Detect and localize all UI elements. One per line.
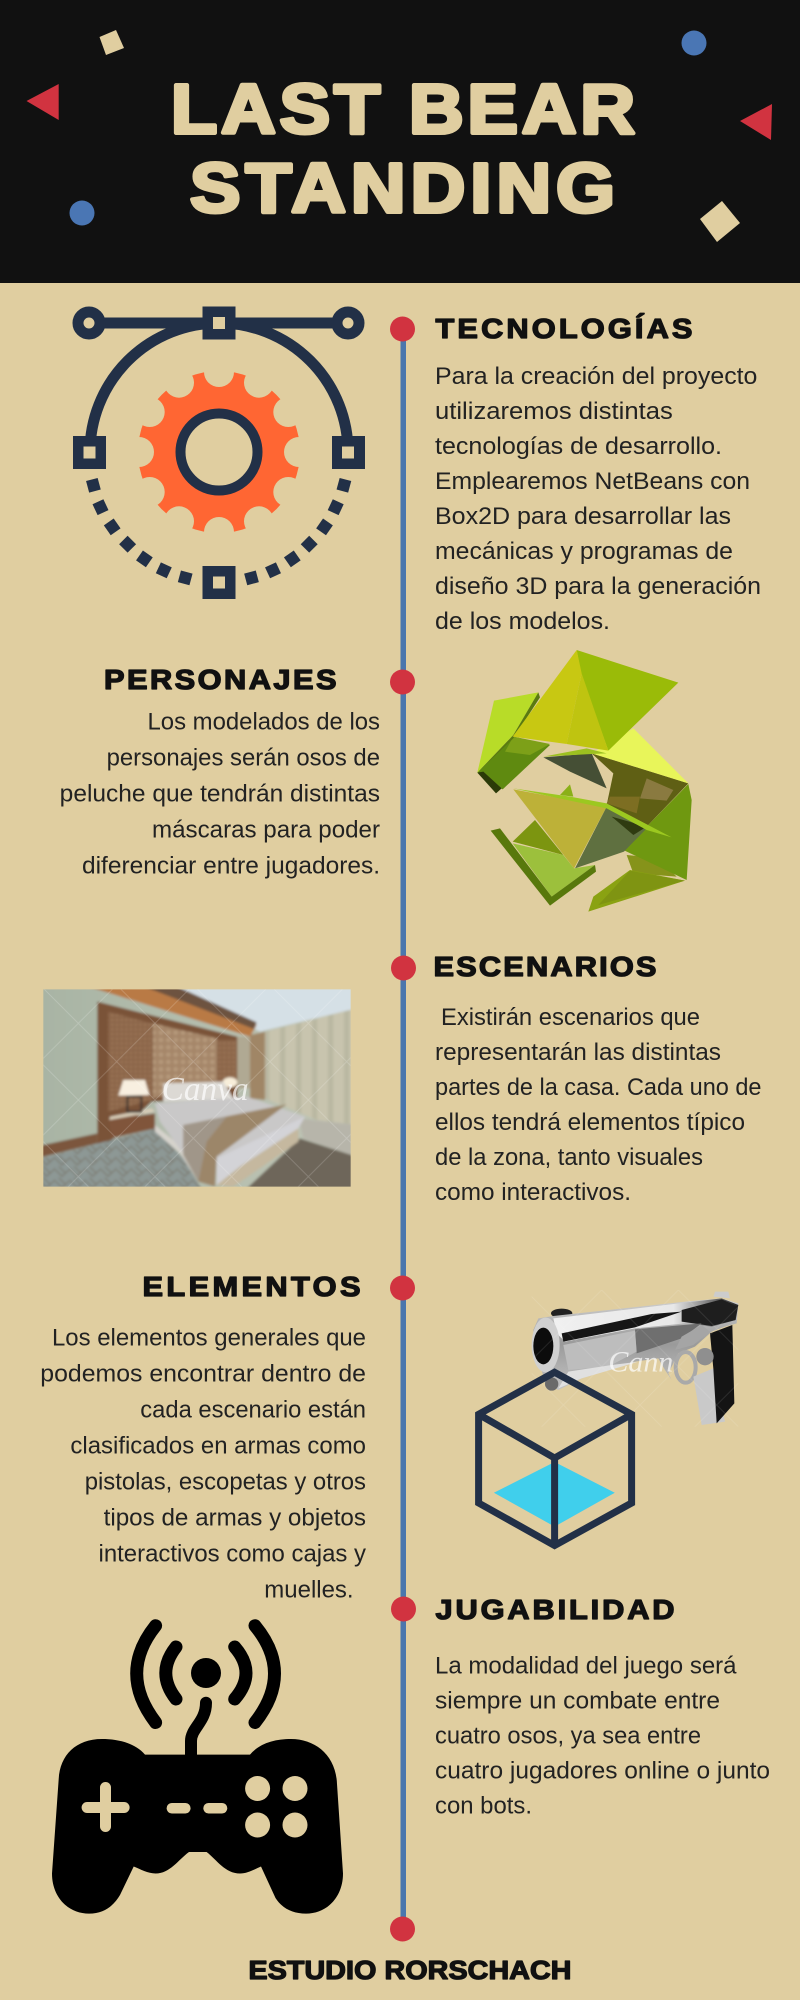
text block: personajes: personajes serán osos de — [107, 744, 380, 772]
icon: pistol — [532, 1290, 738, 1427]
heading: tecnologias: TECNOLOGÍAS — [436, 312, 692, 345]
section: jugabilidad — [435, 1594, 770, 1820]
text block: tecnologias: Box2D para desarrollar las — [435, 503, 731, 530]
text block: jugabilidad: La modalidad del juego será — [435, 1652, 737, 1680]
text block: escenarios: ellos tendrá elementos típico — [435, 1109, 745, 1136]
text block: jugabilidad: con bots. — [435, 1792, 532, 1820]
text block: elementos: podemos encontrar dentro de — [40, 1360, 366, 1388]
text block: personajes: peluche que tendrán distintas — [60, 780, 380, 808]
section: personajes — [60, 664, 380, 880]
photo: hotel bedroom — [40, 985, 357, 1192]
text block: personajes: diferenciar entre jugadores. — [82, 852, 380, 880]
icon: cube — [479, 1372, 632, 1546]
text block: escenarios: representarán las distintas — [435, 1039, 721, 1066]
text block: elementos: interactivos como cajas y — [98, 1540, 366, 1568]
text block: personajes: máscaras para poder — [152, 816, 380, 844]
text block: tecnologias: Para la creación del proyecto — [435, 363, 757, 390]
heading: escenarios: ESCENARIOS — [434, 951, 656, 983]
icon: green 3D shape — [477, 650, 692, 912]
photo: hotel bedroom: Canva — [162, 1071, 249, 1108]
heading: personajes: PERSONAJES — [104, 664, 337, 696]
text block: personajes — [60, 708, 380, 880]
text block: elementos: clasificados en armas como — [70, 1432, 366, 1460]
icon: game controller — [52, 1626, 343, 1914]
icon: gear with bezier curve — [73, 306, 365, 599]
section: tecnologias — [435, 312, 761, 635]
heading: elementos: ELEMENTOS — [142, 1271, 361, 1303]
text block: tecnologias: mecánicas y programas de — [435, 538, 733, 565]
text block: jugabilidad: cuatro jugadores online o junto — [435, 1758, 770, 1784]
section: elementos — [40, 1271, 366, 1604]
text block: tecnologias — [435, 363, 761, 635]
title: STANDING — [190, 150, 615, 227]
text block: elementos — [40, 1324, 366, 1604]
text block: personajes: Los modelados de los — [148, 708, 380, 736]
title: LAST BEAR — [171, 71, 635, 148]
text block: escenarios: de la zona, tanto visuales — [435, 1144, 703, 1171]
icon: pistol: Cann — [608, 1346, 673, 1379]
text block: escenarios — [435, 1004, 762, 1206]
text block: escenarios: como interactivos. — [435, 1179, 631, 1206]
text block: escenarios: Existirán escenarios que — [441, 1004, 700, 1031]
text block: elementos: muelles. — [264, 1576, 354, 1604]
text block: tecnologias: Emplearemos NetBeans con — [435, 468, 750, 495]
text block: tecnologias: utilizaremos distintas — [435, 398, 673, 425]
header panel — [0, 0, 800, 283]
title — [171, 71, 635, 227]
text block: elementos: tipos de armas y objetos — [104, 1504, 366, 1532]
footer: studio name: ESTUDIO RORSCHACH — [248, 1955, 571, 1985]
text block: tecnologias: de los modelos. — [435, 608, 610, 635]
text block: jugabilidad: siempre un combate entre — [435, 1688, 720, 1714]
text block: escenarios: partes de la casa. Cada uno de — [435, 1074, 762, 1101]
text block: tecnologias: tecnologías de desarrollo. — [435, 433, 722, 460]
text block: jugabilidad — [435, 1652, 770, 1820]
decorative shapes — [26, 30, 772, 242]
text block: elementos: pistolas, escopetas y otros — [85, 1468, 366, 1496]
timeline — [390, 316, 416, 1942]
text block: tecnologias: diseño 3D para la generación — [435, 573, 761, 600]
text block: elementos: cada escenario están — [140, 1396, 366, 1424]
text block: elementos: Los elementos generales que — [52, 1324, 366, 1352]
heading: jugabilidad: JUGABILIDAD — [436, 1594, 675, 1626]
section: escenarios — [434, 951, 762, 1206]
text block: jugabilidad: cuatro osos, ya sea entre — [435, 1722, 701, 1750]
